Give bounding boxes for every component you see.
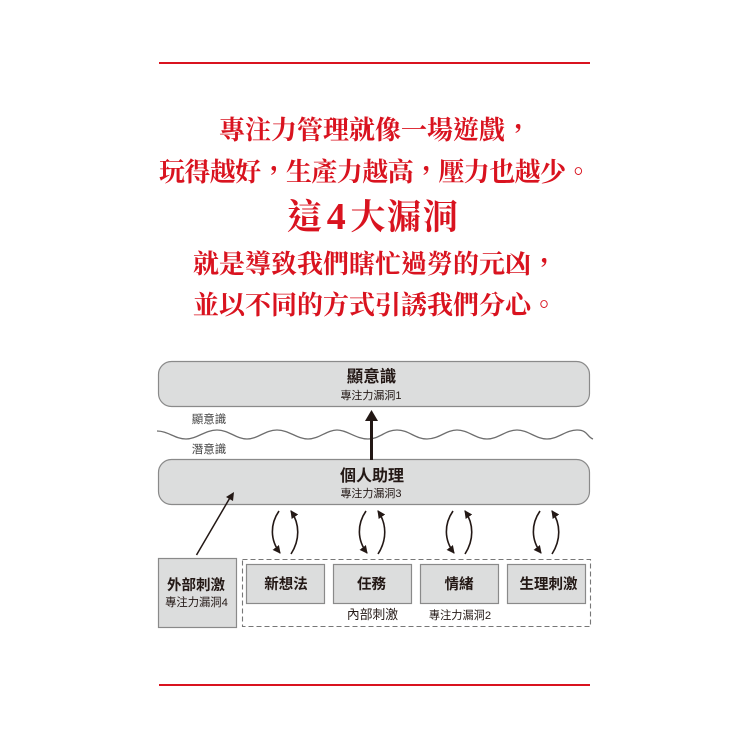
panel: personal assistant (158, 460, 590, 504)
box: emotions: 情緒 (444, 575, 474, 593)
label: attention leak 2: 專注力漏洞2 (429, 608, 491, 622)
heading: conscious mind: 顯意識 (347, 366, 396, 386)
arrows: new ideas loop (272, 511, 298, 554)
label: subconscious: 潛意識 (192, 442, 226, 456)
box: emotions (420, 564, 498, 604)
panel: conscious mind (158, 362, 590, 406)
bottom red rule (159, 684, 590, 686)
heading: personal assistant: 個人助理 (340, 467, 404, 485)
title line 4: 就是導致我們瞎忙過勞的元凶， (193, 250, 557, 279)
box: tasks (334, 564, 412, 604)
panel: internal stimuli (242, 560, 590, 626)
box: physiological stimuli (508, 564, 586, 604)
label: conscious: 顯意識 (192, 412, 226, 426)
title line 2: 玩得越好，生產力越高，壓力也越少。 (159, 158, 591, 187)
wave divider (157, 430, 593, 439)
title line 5: 並以不同的方式引誘我們分心。 (193, 291, 557, 320)
title line 1: 專注力管理就像一場遊戲， (219, 116, 531, 145)
box: external stimuli (158, 558, 236, 628)
label: internal stimuli: 內部刺激 (347, 607, 398, 622)
arrows: tasks loop (359, 511, 385, 554)
arrows: emotions loop (446, 511, 472, 554)
box: tasks: 任務 (357, 576, 386, 593)
title emphasis line: 這 4 大漏洞 (287, 196, 459, 238)
box: external stimuli: 專注力漏洞4 (165, 595, 228, 609)
box: new ideas: 新想法 (264, 575, 308, 593)
box: new ideas (246, 564, 324, 604)
arrows: physiological loop (533, 511, 559, 554)
top red rule (159, 62, 590, 64)
subheading: attention leak 1: 專注力漏洞1 (340, 388, 402, 402)
box: external stimuli: 外部刺激 (167, 576, 225, 594)
arrow: external stimuli to assistant (196, 492, 234, 555)
title (159, 116, 591, 320)
arrow: up to conscious mind (365, 410, 378, 460)
box: physiological stimuli: 生理刺激 (520, 576, 578, 593)
subheading: attention leak 3: 專注力漏洞3 (340, 486, 402, 500)
